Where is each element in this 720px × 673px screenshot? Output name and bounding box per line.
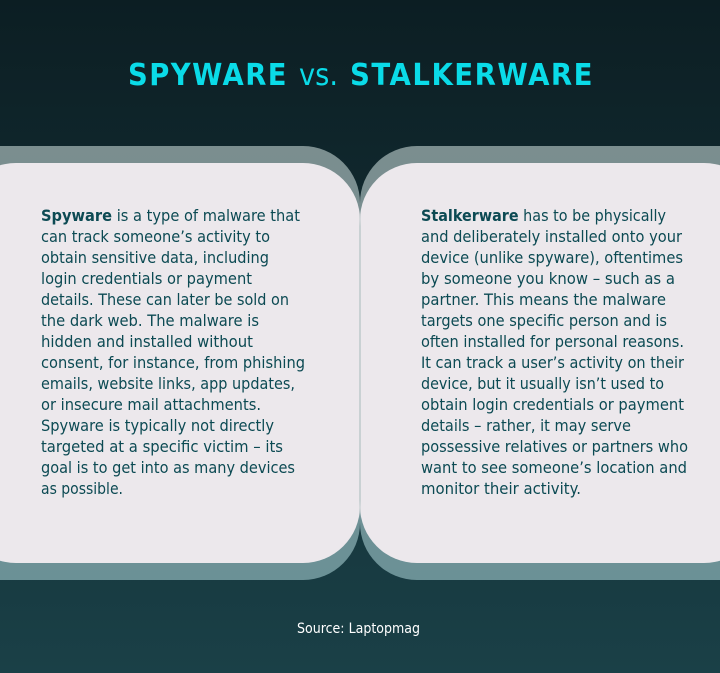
panel: spyware [0,146,360,580]
text block: spyware description: as possible. [41,479,123,498]
text block: spyware description: details. These can later be sold on [41,290,289,309]
text block: stalkerware description: and deliberately installed onto your [421,227,682,246]
source note: Source: Laptopmag [297,621,420,637]
text block: stalkerware description: targets one specific person and is [421,311,667,330]
title [128,58,594,93]
text block: stalkerware description: It can track a user’s activity on their [421,353,684,372]
text block: spyware description: Spyware is a type of malware that [41,206,300,225]
text block: stalkerware description: partner. This means the malware [421,290,666,309]
text block: stalkerware description: monitor their activity. [421,479,581,498]
text block: stalkerware description [421,206,688,498]
text block: spyware description: consent, for instance, from phishing [41,353,305,372]
text block: spyware description: goal is to get into as many devices [41,458,295,477]
text block: spyware description: hidden and installed without [41,332,253,351]
text block: stalkerware description: device (unlike spyware), oftentimes [421,248,683,267]
text block: stalkerware description: by someone you know – such as a [421,269,675,288]
text block: spyware description: can track someone’s activity to [41,227,270,246]
text block: spyware description [41,206,305,498]
text block: spyware description: Spyware is typically not directly [41,416,274,435]
text block: stalkerware description: Stalkerware has to be physically [421,206,666,225]
text block: spyware description: targeted at a specific victim – its [41,437,283,456]
text block: stalkerware description: want to see someone’s location and [421,458,687,477]
text block: spyware description: or insecure mail attachments. [41,395,261,414]
text block: stalkerware description: often installed for personal reasons. [421,332,684,351]
text block: spyware description: login credentials or payment [41,269,252,288]
text block: spyware description: the dark web. The malware is [41,311,259,330]
title: vs. [299,58,338,93]
panel: stalkerware [359,146,720,580]
title: STALKERWARE [350,58,594,93]
text block: spyware description: emails, website links, app updates, [41,374,295,393]
title: SPYWARE [128,58,288,93]
text block: stalkerware description: details – rather, it may serve [421,416,631,435]
text block: stalkerware description: obtain login credentials or payment [421,395,684,414]
text block: spyware description: obtain sensitive data, including [41,248,269,267]
text block: stalkerware description: device, but it usually isn’t used to [421,374,664,393]
text block: stalkerware description: possessive relatives or partners who [421,437,688,456]
